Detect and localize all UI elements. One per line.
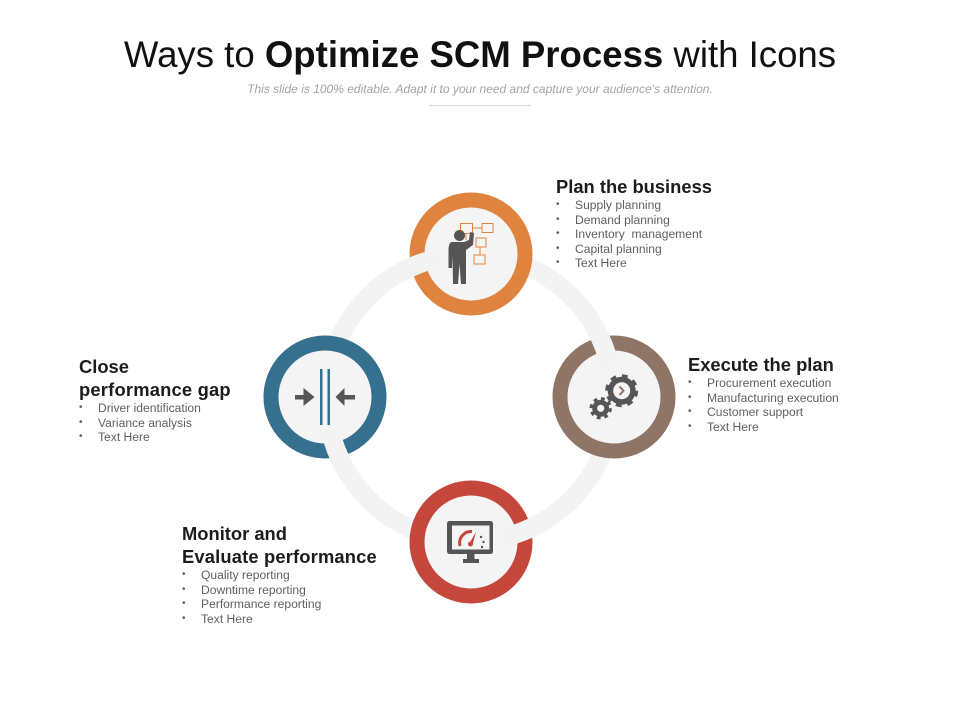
text: monitor and evaluate: Quality reporting	[201, 568, 290, 582]
icon: converging arrows	[295, 369, 355, 425]
text: monitor and evaluate: Monitor and	[182, 523, 287, 544]
text: execute the plan: Text Here	[707, 420, 759, 434]
node: close gap	[271, 343, 379, 468]
text: close performance gap: Driver identification	[98, 401, 201, 415]
text: plan the business	[556, 176, 712, 270]
central grey ring	[326, 254, 614, 542]
text: execute the plan: Execute the plan	[688, 354, 834, 375]
text: plan the business: Capital planning	[575, 242, 662, 256]
text: execute the plan: Procurement execution	[707, 376, 831, 390]
node: plan	[400, 200, 525, 308]
text: close performance gap: performance gap	[79, 379, 231, 400]
text: plan the business: Inventory management	[575, 227, 702, 241]
text: monitor and evaluate: Downtime reporting	[201, 582, 306, 596]
subtitle: This slide is 100% editable. Adapt it to your need and capture your audience’s attention.	[247, 82, 713, 96]
text: monitor and evaluate: Text Here	[201, 612, 253, 626]
text: close performance gap	[79, 356, 231, 444]
text: monitor and evaluate	[182, 523, 377, 626]
text: execute the plan	[688, 354, 839, 434]
text: plan the business: Plan the business	[556, 176, 712, 197]
text: plan the business: Text Here	[575, 256, 627, 270]
text: execute the plan: Customer support	[707, 405, 803, 419]
text: close performance gap: Text Here	[98, 430, 150, 444]
text: execute the plan: Manufacturing execution	[707, 390, 839, 404]
icon: monitor with gauge	[447, 521, 493, 563]
text: plan the business: Supply planning	[575, 198, 661, 212]
text: plan the business: Demand planning	[575, 212, 670, 226]
text: monitor and evaluate: Performance reporting	[201, 597, 321, 611]
node: monitor	[417, 488, 540, 596]
text: close performance gap: Close	[79, 356, 129, 377]
node: execute	[560, 328, 668, 451]
text: close performance gap: Variance analysis	[98, 416, 192, 430]
icon: gears	[591, 376, 636, 418]
title: Ways to Optimize SCM Process with Icons	[124, 34, 836, 75]
icon: person with flowchart	[448, 224, 493, 284]
text: monitor and evaluate: Evaluate performance	[182, 546, 377, 567]
